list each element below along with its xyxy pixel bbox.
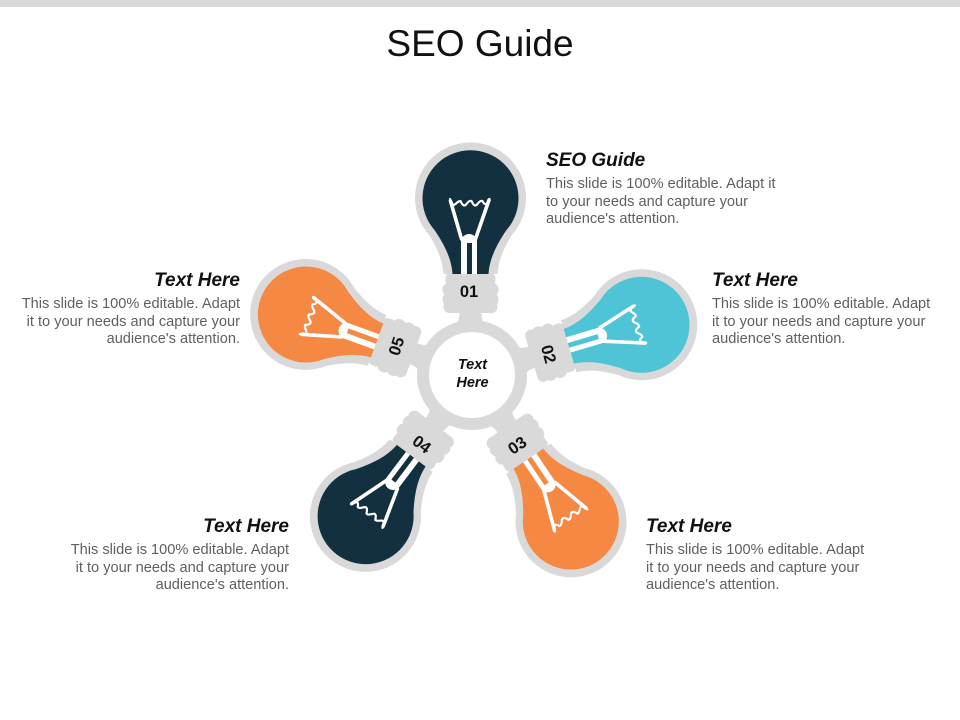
text block: 04 xyxy=(71,516,289,593)
text block: 05 xyxy=(22,270,240,347)
text block: 04: it to your needs and capture your xyxy=(76,560,289,576)
bulb 04 xyxy=(288,379,488,594)
title: SEO Guide xyxy=(386,23,574,64)
text block: 04: audience's attention. xyxy=(156,577,289,593)
hub ring xyxy=(423,326,521,424)
text block: 02: audience's attention. xyxy=(712,331,845,347)
text block: 04: Text Here xyxy=(203,516,289,537)
text block: 05: This slide is 100% editable. Adapt xyxy=(22,296,240,312)
text block: 02 xyxy=(712,270,930,347)
bulb 04: 04 xyxy=(409,432,435,458)
text block: 05: it to your needs and capture your xyxy=(27,314,240,330)
text block: 03: audience's attention. xyxy=(646,577,779,593)
bulb 01 xyxy=(415,142,526,328)
text block: 03 xyxy=(646,516,864,593)
text block: 03: it to your needs and capture your xyxy=(646,560,859,576)
text block: SEO Guide xyxy=(546,150,776,227)
text block: 02: Text Here xyxy=(712,270,798,291)
text block: 05: Text Here xyxy=(154,270,240,291)
bulb 05 xyxy=(234,243,447,411)
bulb 03: 03 xyxy=(505,433,530,458)
hub label: Text xyxy=(458,357,488,373)
bulb 05: 05 xyxy=(386,335,408,358)
text block: 03: This slide is 100% editable. Adapt xyxy=(646,542,864,558)
hub label xyxy=(456,357,489,391)
text block: SEO Guide: SEO Guide xyxy=(546,150,645,171)
text block: 05: audience's attention. xyxy=(107,331,240,347)
bulb 01: 01 xyxy=(460,283,478,301)
text block: SEO Guide: audience's attention. xyxy=(546,211,679,227)
text block: 03: Text Here xyxy=(646,516,732,537)
text block: 02: it to your needs and capture your xyxy=(712,314,925,330)
hub label: Here xyxy=(456,375,489,391)
bulb 03 xyxy=(452,383,648,599)
text block: 02: This slide is 100% editable. Adapt xyxy=(712,296,930,312)
text block: SEO Guide: to your needs and capture your xyxy=(546,194,748,210)
text block: SEO Guide: This slide is 100% editable. Adapt it xyxy=(546,176,776,192)
bulb 02: 02 xyxy=(537,343,559,365)
bulb 02 xyxy=(501,256,711,415)
text block: 04: This slide is 100% editable. Adapt xyxy=(71,542,289,558)
